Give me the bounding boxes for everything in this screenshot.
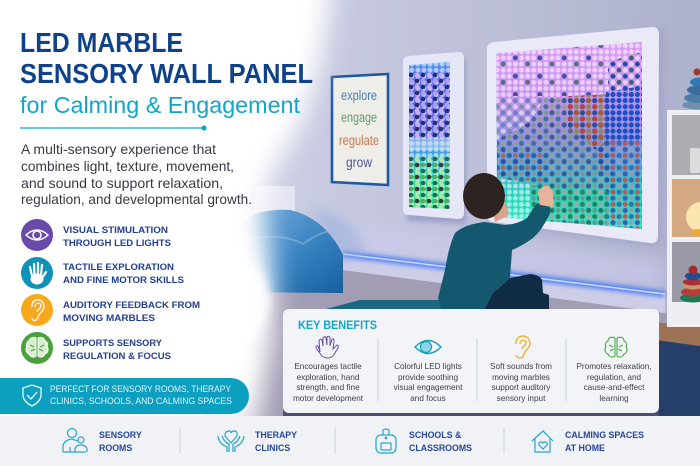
white side table [255,186,295,212]
benefit: auditory: support auditory [492,383,551,392]
floor [200,266,700,416]
benefit: regulation: regulation, and [587,373,642,382]
lower wall lavender light [343,225,665,290]
hair [463,173,505,219]
small LED marble panel [403,52,466,224]
setting: schools and classrooms: CLASSROOMS [409,443,472,453]
stacking toy on shelf [680,266,700,302]
beanbag [232,210,343,293]
intro paragraph: and sound to support relaxation, [21,176,223,191]
key benefits heading: KEY BENEFITS [298,318,377,332]
boy reaching to the panel [438,173,554,309]
feature: tactile exploration [21,257,185,289]
benefit: tactile: strength, and fine [296,383,360,392]
setting: therapy clinics: CLINICS [255,443,290,453]
bottom strip: settings [0,416,700,466]
feature: tactile exploration: TACTILE EXPLORATION [63,262,174,273]
wall poster: grow [346,155,372,170]
benefit: regulation: learning [599,394,629,403]
setting: calming spaces at home: AT HOME [565,443,605,453]
wood floor right [650,322,700,416]
trousers [483,274,549,309]
benefit: regulation: cause-and-effect [584,383,645,392]
feature: visual stimulation [21,219,172,251]
benefit: auditory [490,336,552,403]
feature: sensory regulation: REGULATION & FOCUS [63,351,172,362]
benefit: visual: provide soothing [398,373,458,382]
setting: calming spaces at home: CALMING SPACES [565,430,644,440]
setting: sensory rooms [63,428,142,453]
subtitle: for Calming & Engagement [20,92,300,118]
intro paragraph: combines light, texture, movement, [21,159,234,174]
benefit: auditory: moving marbles [492,373,550,382]
benefit: auditory: Soft sounds from [490,362,552,371]
wall shadow behind beanbag [310,208,366,262]
pale floor ball [181,252,269,348]
benefit: tactile [293,336,364,403]
wall poster: explore [341,88,377,103]
wall poster: engage [341,110,377,125]
intro paragraph: A multi-sensory experience that [21,142,216,157]
intro paragraph [21,142,252,207]
title rule [20,125,207,131]
feature: auditory feedback: MOVING MARBLES [63,313,156,324]
wall poster [332,74,388,185]
LED strip glow [343,254,665,294]
setting: therapy clinics [218,430,297,453]
sweater [438,203,550,309]
banner: perfect for: PERFECT FOR SENSORY ROOMS, THERAPY [50,384,231,394]
benefit: regulation [576,337,652,403]
large LED marble panel [487,27,664,246]
feature: sensory regulation [21,332,172,364]
feature: sensory regulation: SUPPORTS SENSORY [63,338,163,349]
rug under card edge [283,405,659,416]
benefit: tactile: Encourages tactile [294,362,362,371]
setting: schools and classrooms [376,429,472,453]
benefit: visual: and focus [410,394,446,403]
benefit: regulation: Promotes relaxation, [576,362,652,371]
feature: tactile exploration: AND FINE MOTOR SKILLS [63,275,185,286]
panel: key benefits [283,309,659,413]
bookshelf with toys [667,68,700,327]
feature: auditory feedback: AUDITORY FEEDBACK FROM [63,300,200,311]
teal rug left [322,300,450,310]
baseboard [343,255,665,313]
benefit: tactile: exploration, hand [297,373,360,382]
setting: therapy clinics: THERAPY [255,430,297,440]
setting: sensory rooms: SENSORY [99,430,142,440]
hand [538,186,554,207]
feature: auditory feedback [21,294,200,326]
intro paragraph: regulation, and developmental growth. [21,192,252,207]
white left solid area [0,0,205,416]
icon: shield check [23,385,41,406]
feature: visual stimulation: VISUAL STIMULATION [63,225,168,236]
title: LED MARBLE [20,27,183,58]
title [20,27,313,89]
title: SENSORY WALL PANEL [20,58,313,89]
face [493,196,508,222]
benefit: visual: Colorful LED lights [394,362,462,371]
benefit: auditory: sensory input [497,394,546,403]
benefit: tactile: motor development [293,394,364,403]
setting: schools and classrooms: SCHOOLS & [409,430,462,440]
white left fade [0,0,335,430]
stacking toy on top [682,68,700,110]
rug right [655,340,700,416]
feature: visual stimulation: THROUGH LED LIGHTS [63,238,172,249]
benefit: visual [394,340,463,403]
benefit: visual: visual engagement [394,383,463,392]
banner: perfect for: CLINICS, SCHOOLS, AND CALMING SPACES [50,396,232,406]
banner: perfect for [0,378,249,414]
wall poster: regulate [339,133,379,148]
setting: calming spaces at home [532,430,644,453]
setting: sensory rooms: ROOMS [99,443,132,453]
